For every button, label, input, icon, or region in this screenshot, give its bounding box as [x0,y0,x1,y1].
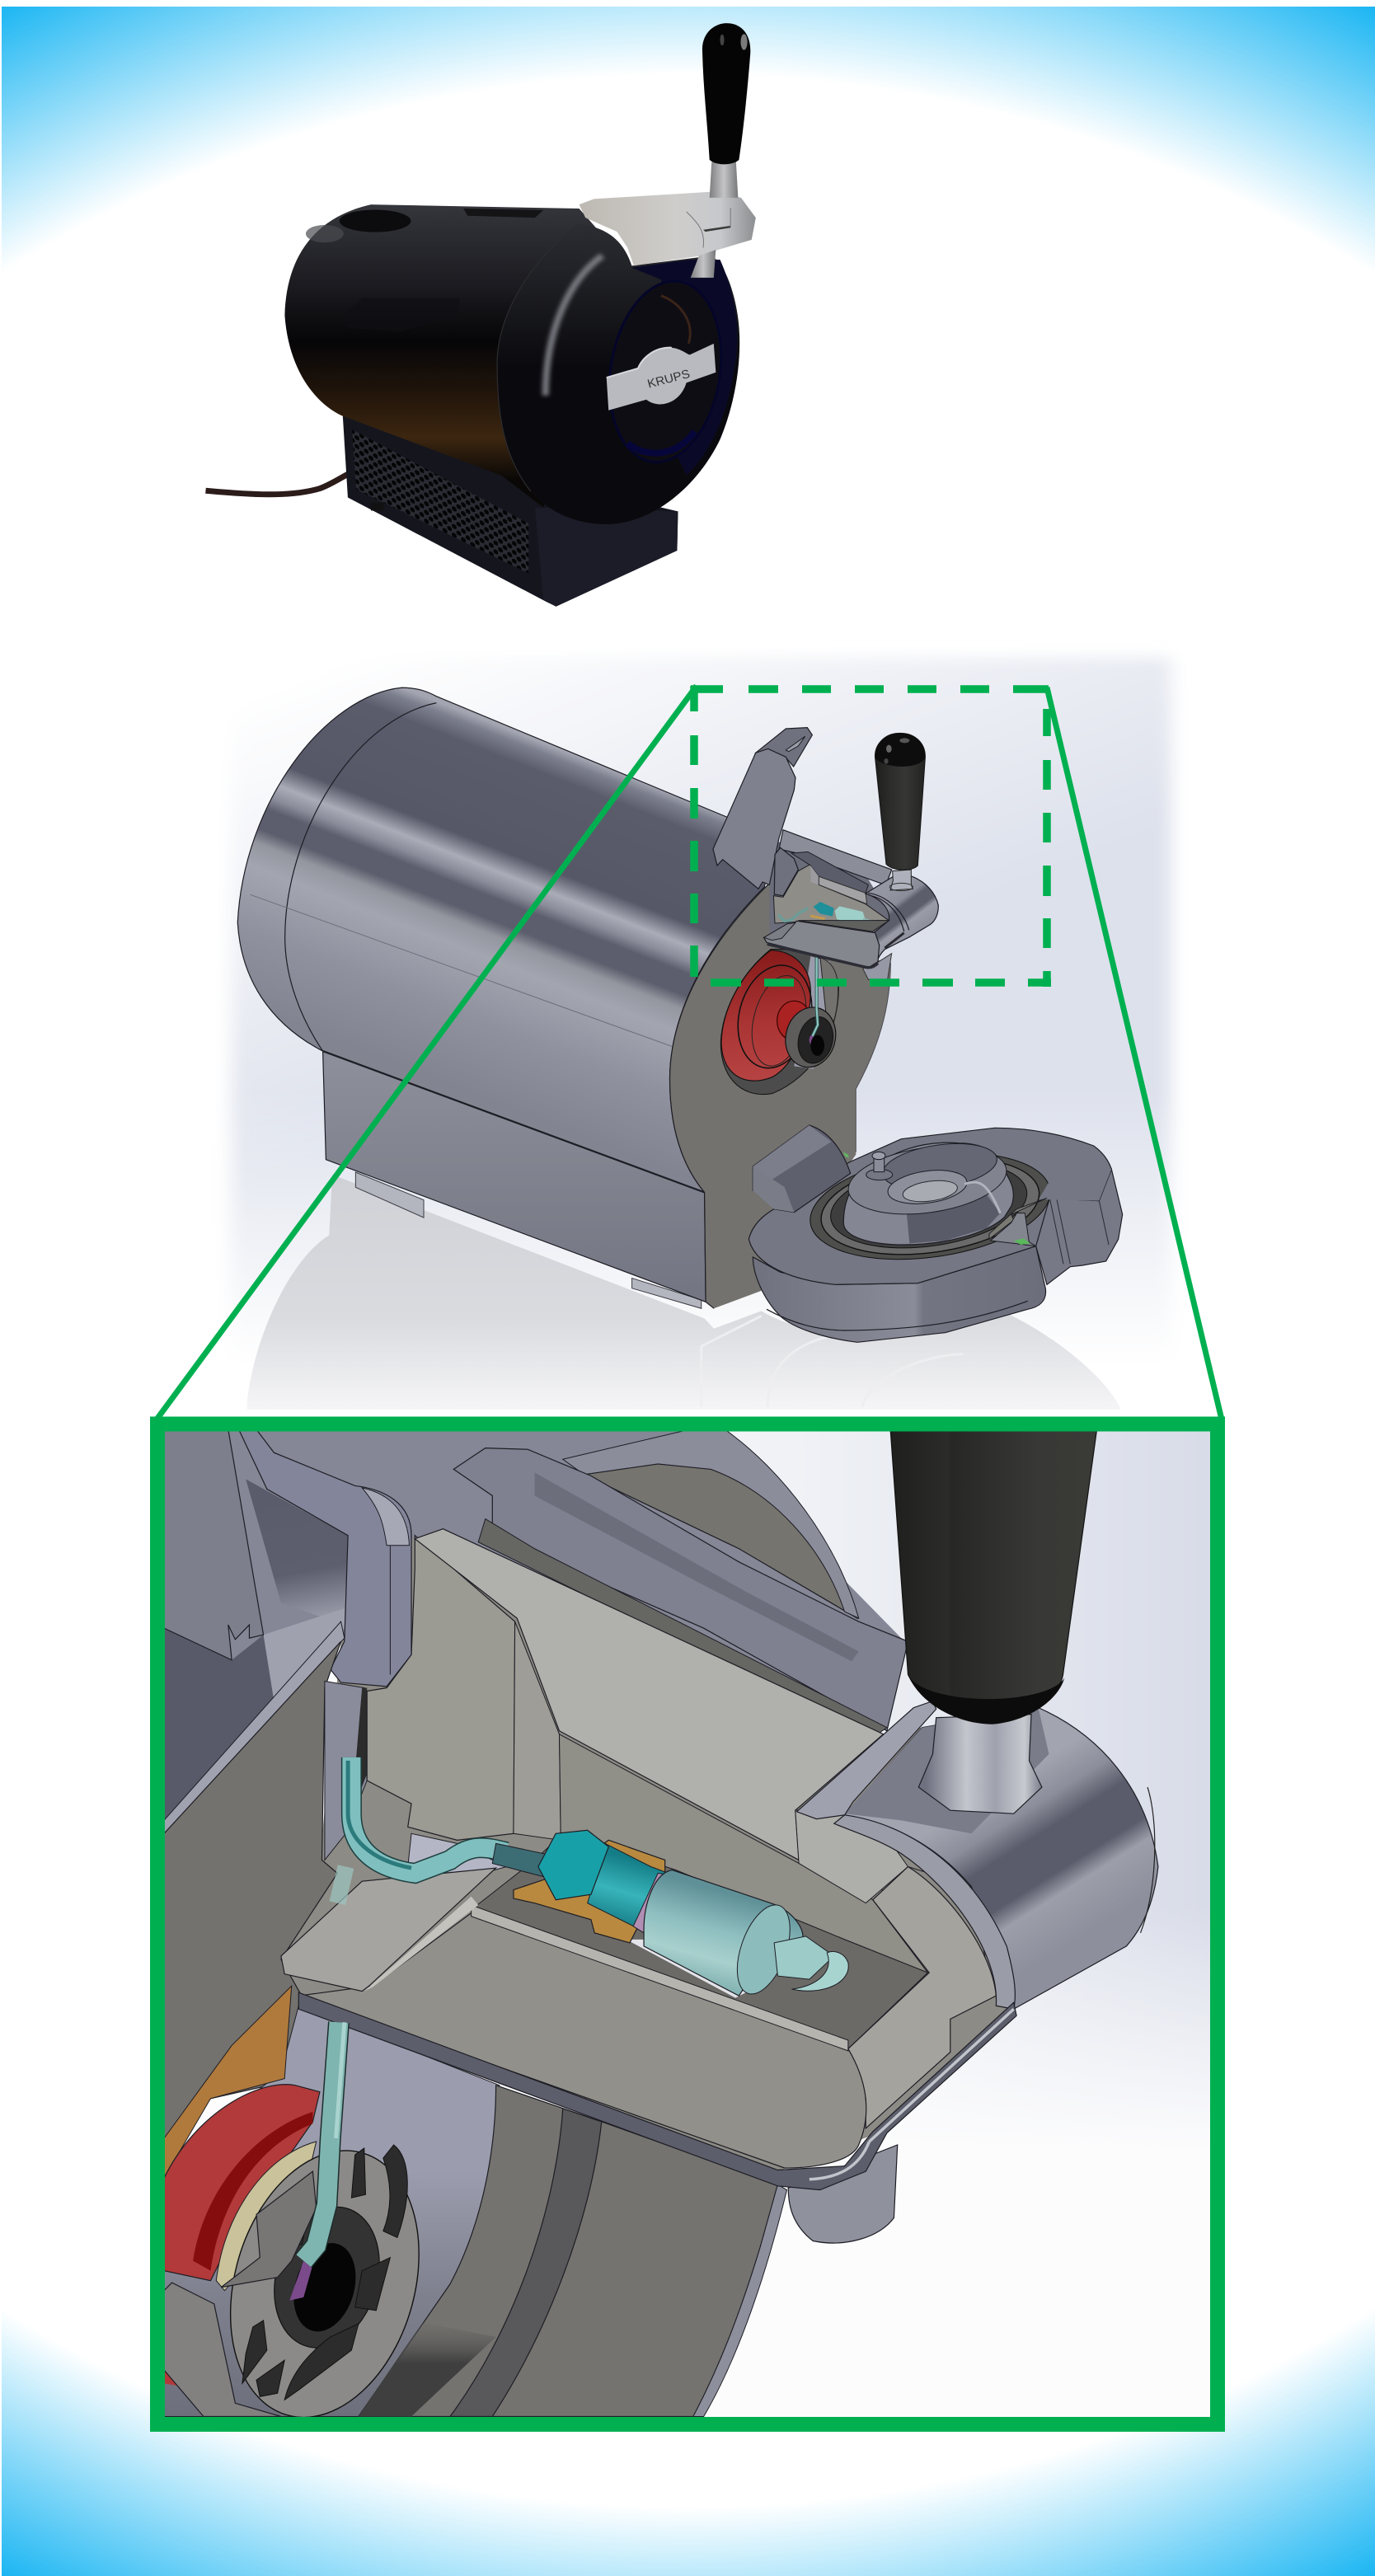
barrel cylinder [237,687,774,1192]
lower spout stem [788,2145,898,2243]
barrel body [284,204,627,508]
interior backing [769,838,893,956]
blue gap below tube [408,1833,506,1877]
lever handle [875,733,925,870]
red dish [721,950,822,1081]
notched plate [164,1429,264,1660]
inner left wall [367,1536,515,1840]
pin [866,1152,893,1180]
tray [764,921,889,968]
slot and green latch [843,1152,1047,1246]
circular groove [804,1139,1057,1274]
power cord [205,473,349,495]
right cut block top [1039,1160,1111,1201]
interior backing behind walls [281,1536,1039,2171]
dashed detail box [691,686,1051,987]
teal valve body [538,1830,669,1933]
rear feet [355,1172,702,1308]
water tube upper [337,1757,506,1903]
key block [221,2171,317,2287]
base box [341,396,678,607]
KRUPS badge: KRUPS [646,367,692,391]
centre hump [843,1137,1013,1245]
red disc [164,2085,320,2386]
inner upper block [415,1529,884,1860]
hub wheel [779,1002,842,1072]
seam highlight on lip [810,2009,1014,2180]
outer side wall [753,1246,1046,1342]
lower base box [323,1051,706,1302]
lower spout [863,954,892,979]
lower interior panel [164,2006,500,2416]
KRUPS badge [607,344,716,411]
lever handle detail [890,1429,1097,1724]
CAD model: machine body [237,687,890,1308]
front cut plate [669,882,890,1308]
round plate behind [584,1464,857,1618]
curved seam [834,1815,1015,2009]
tray floor [472,1833,927,2048]
floor reflection [247,1175,1121,1410]
valve cylinder [644,1870,848,2000]
CAD model: removed drip tray [749,1125,1123,1342]
silver tap head [580,192,756,278]
green frame of detail panel [157,1424,1218,2424]
barrel front ring [497,223,739,524]
barrel surface behind [164,1429,904,1833]
product photo: tap machine [205,23,756,607]
right interior floor [848,1866,996,2128]
hole in front ring [598,274,733,469]
spout body [845,1708,1158,2009]
green zoom connector lines [157,686,1222,1419]
detail panel: magnified tap cross-section [162,1429,1218,2436]
valve miniature [778,902,872,926]
water tube lower [303,2022,345,2261]
hinge bracket [774,847,798,896]
silver lever stem [710,162,738,198]
lid hinge band [453,1448,908,1738]
sectioned plate, left [164,1621,367,2158]
inner rear wall [514,1621,561,1840]
wheel cylinder [164,2283,281,2416]
rear cover band [779,830,892,884]
spout recess rim [796,1701,936,1819]
front lip of tray [298,1992,1016,2190]
lever stem detail [918,1715,1042,1814]
spout head [866,876,938,963]
valve inlet pipe [492,1843,549,1877]
gold holder [514,1840,665,1943]
CAD panel: gradient backdrop with reflection [206,658,1195,1422]
copper disc [164,1986,292,2178]
tray top surface [749,1128,1111,1284]
handle block [753,1125,851,1213]
CAD model: open hole, lid and tap [713,728,938,1095]
lever stem [889,870,913,891]
detail backdrop fade [704,1960,1210,2417]
right chunk [1036,1169,1123,1284]
lower plate curve [359,2086,787,2416]
S-shaped bracket [239,1429,411,1687]
barrel opening [720,949,838,1095]
inner cavity walls [773,852,889,923]
black lever handle [702,23,750,164]
lid [713,728,812,889]
tray top and tab [281,1868,866,2168]
water tube down [813,958,818,1036]
slotted wheel [202,2132,447,2436]
